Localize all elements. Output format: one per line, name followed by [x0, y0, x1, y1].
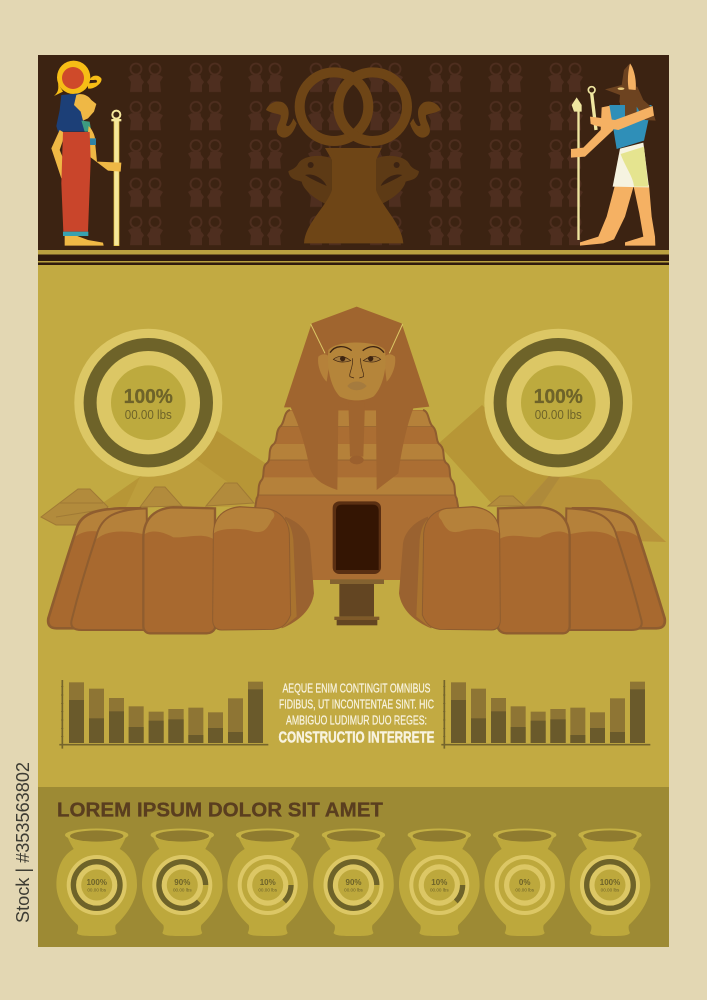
figure: Anubis with staffs — [571, 63, 656, 246]
vase 10% second: 00.00 lbs — [430, 888, 449, 892]
lion head — [74, 94, 96, 121]
vase 100% last: 100% — [600, 878, 620, 887]
vase 90% — [142, 828, 223, 936]
vase 90% second: 90% — [345, 878, 362, 887]
wig — [620, 87, 656, 121]
vase 0% — [484, 828, 565, 936]
back arm — [571, 105, 613, 158]
pyramids left — [41, 427, 265, 525]
gauge: right 100%: 00.00 lbs — [535, 408, 582, 422]
neck collar — [339, 398, 375, 408]
sun disc crown — [54, 61, 102, 96]
door — [333, 501, 381, 574]
vase 10%: 00.00 lbs — [258, 888, 278, 892]
arms — [51, 130, 70, 179]
text block: center caption: CONSTRUCTIO INTERRETE — [278, 730, 435, 746]
red dress — [61, 132, 91, 232]
headdress — [284, 307, 429, 490]
pyramids right — [438, 405, 666, 542]
vase 100%: 00.00 lbs — [87, 888, 107, 892]
hieroglyph pattern — [126, 62, 591, 251]
headdress bands — [311, 324, 403, 353]
gauge: left 100% — [74, 329, 222, 477]
text block: center caption: AEQUE ENIM CONTINGIT OMNIBUS — [282, 682, 430, 696]
pedestal — [330, 579, 384, 625]
long staff — [572, 97, 582, 240]
dress hem — [63, 232, 88, 236]
vase 0%: 0% — [519, 878, 530, 887]
vase 100% last: 00.00 lbs — [601, 888, 620, 892]
vase 90%: 00.00 lbs — [173, 888, 192, 892]
vase 90%: 90% — [174, 878, 190, 887]
ears — [318, 354, 395, 382]
facial features — [330, 347, 384, 390]
vase 10% second: 10% — [431, 878, 447, 887]
front arm — [590, 106, 654, 130]
vase 10% second — [399, 828, 480, 936]
vase 100%: 100% — [86, 878, 107, 887]
stepped shoulders — [250, 407, 463, 583]
vase 90% second — [313, 828, 394, 936]
left paw — [48, 507, 314, 633]
beard — [348, 402, 365, 457]
frieze stripes — [38, 250, 669, 265]
panel: top frieze — [38, 55, 669, 265]
gauge: right 100%: 100% — [534, 386, 583, 408]
vase 0%: 00.00 lbs — [515, 888, 535, 892]
sphinx — [48, 307, 665, 633]
torso — [609, 105, 652, 149]
emblem: entwined snakes and falcons — [266, 72, 441, 243]
legs — [580, 185, 655, 246]
vase 100% last — [570, 828, 650, 936]
panel: middle desert scene — [38, 265, 669, 787]
text block: center caption: FIDIBUS, UT INCONTENTAE SINT. HIC — [279, 698, 434, 712]
side stock id text: Stock | #353563802 — [13, 762, 33, 923]
jackal head — [605, 64, 639, 103]
collar — [81, 121, 91, 132]
headdress — [56, 93, 87, 132]
panel: vases band — [38, 787, 669, 947]
gauge: left 100%: 00.00 lbs — [125, 408, 172, 422]
gauge: left 100%: 100% — [124, 386, 173, 408]
text block: center caption — [278, 682, 435, 746]
face — [328, 342, 386, 400]
right paw — [399, 507, 665, 633]
figure: lion goddess with ankh staff — [51, 61, 121, 246]
ankh staff — [588, 87, 596, 130]
vase 90% second: 00.00 lbs — [344, 888, 364, 892]
heading: LOREM IPSUM DOLOR SIT AMET — [57, 798, 383, 822]
vase 10%: 10% — [260, 878, 276, 887]
vase 100% — [56, 828, 137, 936]
staff with ankh — [111, 111, 121, 246]
feet — [65, 236, 104, 246]
text block: center caption: AMBIGUO LUDIMUR DUO REGES: — [286, 714, 427, 728]
kilt — [613, 143, 649, 187]
bar chart: right — [441, 680, 650, 749]
bar chart: left — [59, 680, 268, 749]
gauge: right 100% — [484, 329, 632, 477]
vase 10% — [227, 828, 308, 936]
sphinx body — [250, 307, 463, 625]
